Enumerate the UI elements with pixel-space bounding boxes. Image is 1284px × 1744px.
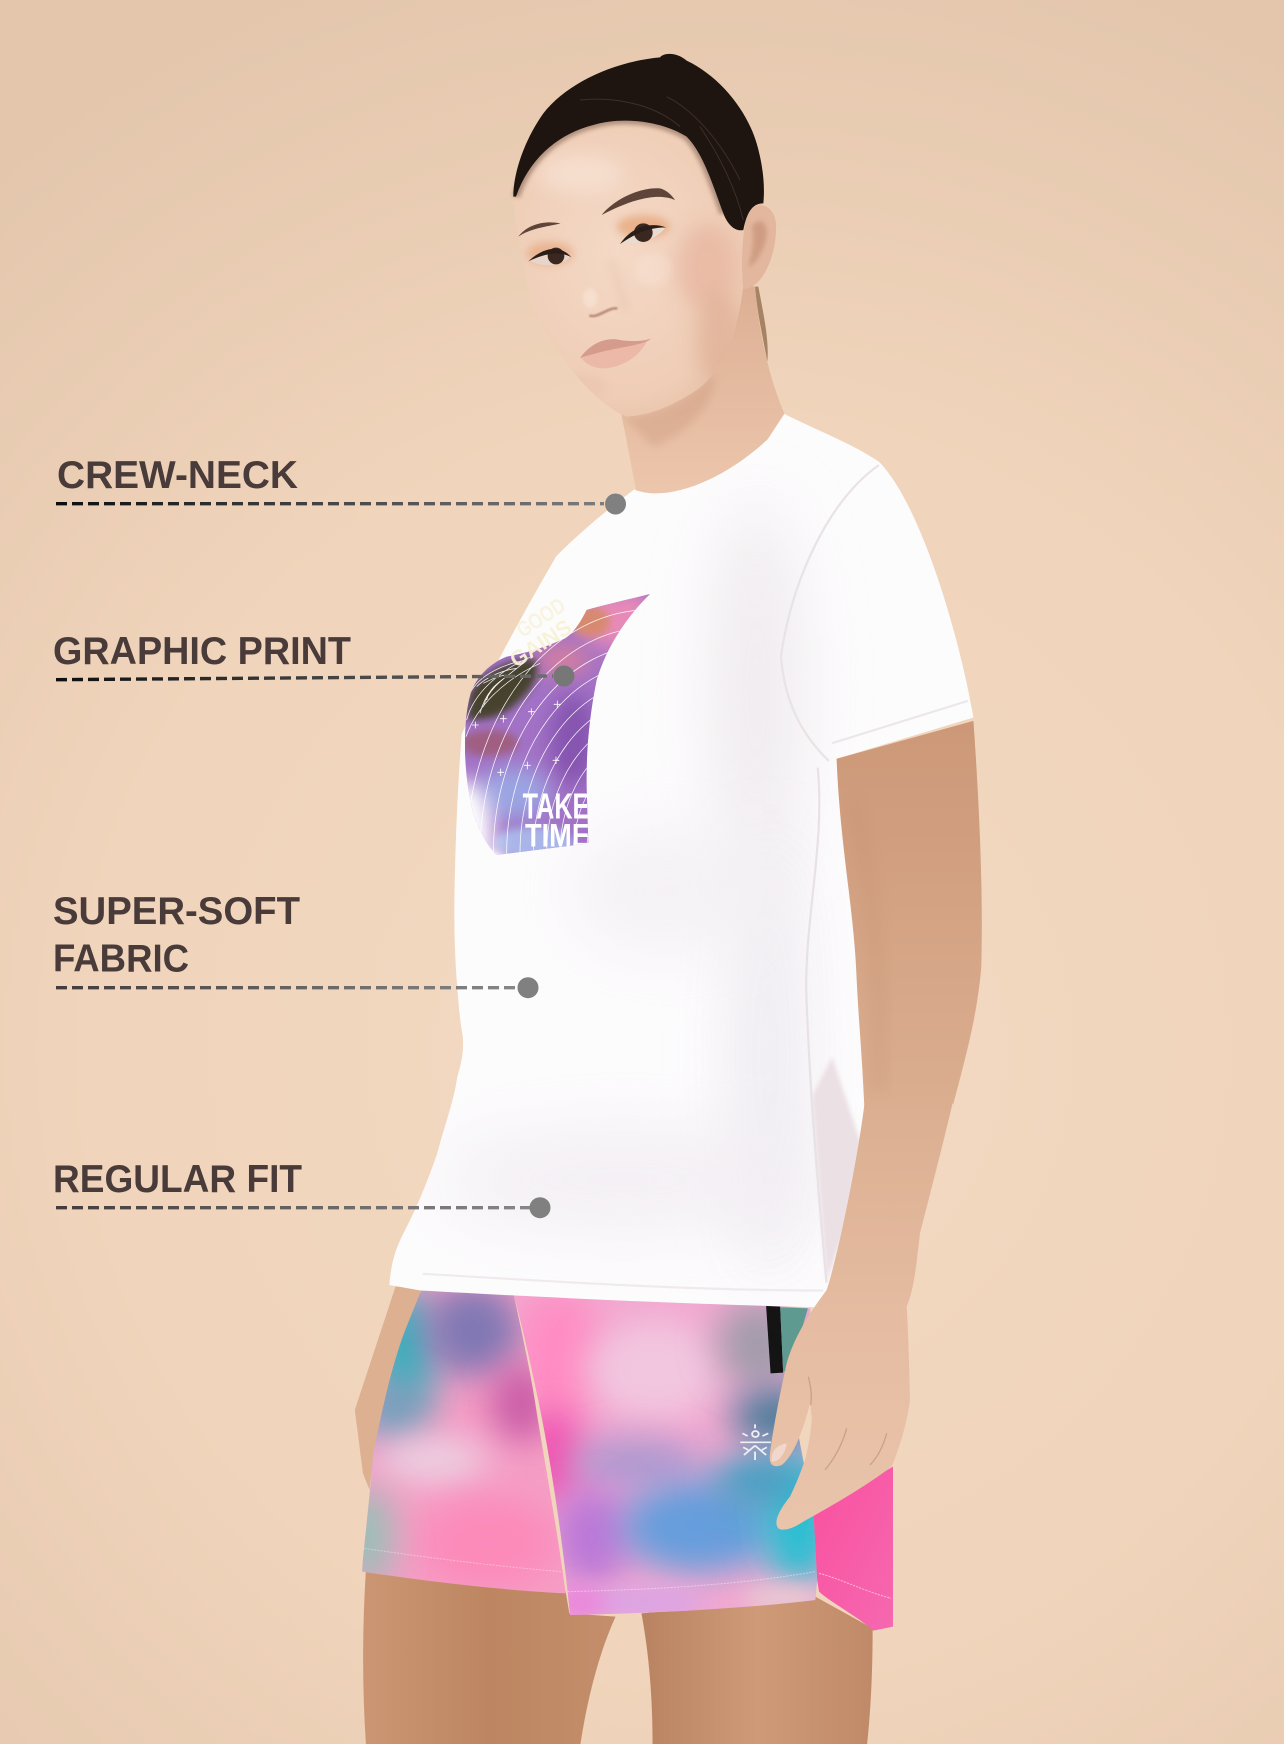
left hand and arm	[355, 1287, 425, 1490]
side seam	[806, 768, 827, 1283]
upper arm shading	[854, 801, 879, 1090]
take time text: TIME	[525, 818, 590, 854]
label: regular fit: REGULAR FIT	[53, 1158, 302, 1201]
label: super-soft fabric: SUPER-SOFT	[53, 890, 300, 933]
left eye	[528, 248, 571, 265]
brand logo	[740, 1424, 771, 1460]
head and neck	[511, 54, 784, 494]
finger creases	[808, 1377, 887, 1470]
right upper arm	[837, 721, 982, 1108]
thumb nail	[772, 1443, 787, 1462]
shorts side panel	[812, 1467, 893, 1631]
teal pocket strip	[780, 1307, 808, 1372]
label: graphic print: GRAPHIC PRINT	[53, 630, 351, 673]
callout: graphic print	[53, 630, 574, 686]
lips	[580, 338, 652, 368]
neck	[620, 273, 813, 493]
bottom hem stitch	[423, 1274, 823, 1290]
right eye	[620, 223, 666, 244]
right leg	[641, 1597, 873, 1744]
hair strands	[580, 97, 743, 220]
left leg	[363, 1570, 616, 1744]
marker dot: graphic print	[554, 666, 574, 686]
side hem stitch	[819, 1573, 891, 1598]
right eyebrow	[602, 188, 675, 215]
sparkle stars	[472, 701, 561, 776]
dashed leader: regular fit	[56, 1206, 530, 1209]
marker dot: regular fit	[530, 1197, 550, 1218]
good gains text: GAINS	[505, 614, 576, 672]
model photo illustration	[340, 54, 982, 1744]
callout: crew-neck	[56, 454, 626, 514]
dashed leader: crew-neck	[56, 502, 604, 505]
dashed leader: graphic print	[56, 676, 553, 680]
right forearm and hand	[770, 1100, 953, 1530]
ear	[742, 205, 776, 289]
shorts front panel	[514, 1296, 817, 1615]
label: crew-neck: CREW-NECK	[57, 454, 298, 497]
t-shirt	[389, 414, 973, 1307]
hairline softening	[516, 121, 723, 213]
graphic print	[465, 594, 650, 855]
neck shadow	[623, 373, 714, 447]
take time text: TAKE	[523, 785, 589, 826]
label: super-soft fabric: FABRIC	[53, 938, 189, 980]
take time text	[522, 794, 588, 846]
callout: super-soft fabric	[53, 890, 538, 998]
marker dot: crew-neck	[605, 494, 626, 514]
sleeve seam	[781, 465, 879, 761]
good gains text	[493, 592, 582, 672]
shaded side fold	[812, 1059, 860, 1278]
shirt shading	[475, 531, 860, 1279]
contour lines	[466, 610, 635, 854]
marker dot: super-soft fabric	[518, 977, 538, 998]
nose	[589, 308, 617, 316]
shorts left panel	[362, 1290, 566, 1594]
callout: regular fit	[53, 1158, 550, 1218]
shorts	[340, 1283, 893, 1631]
hair strand behind neck	[755, 287, 768, 362]
left eyebrow	[518, 222, 561, 237]
face	[526, 140, 762, 416]
hair	[513, 54, 764, 230]
pocket zip	[766, 1306, 783, 1373]
sleeve hem stitch	[832, 701, 968, 743]
dashed leader: super-soft fabric	[56, 986, 518, 989]
good gains text: GOOD	[512, 592, 570, 642]
